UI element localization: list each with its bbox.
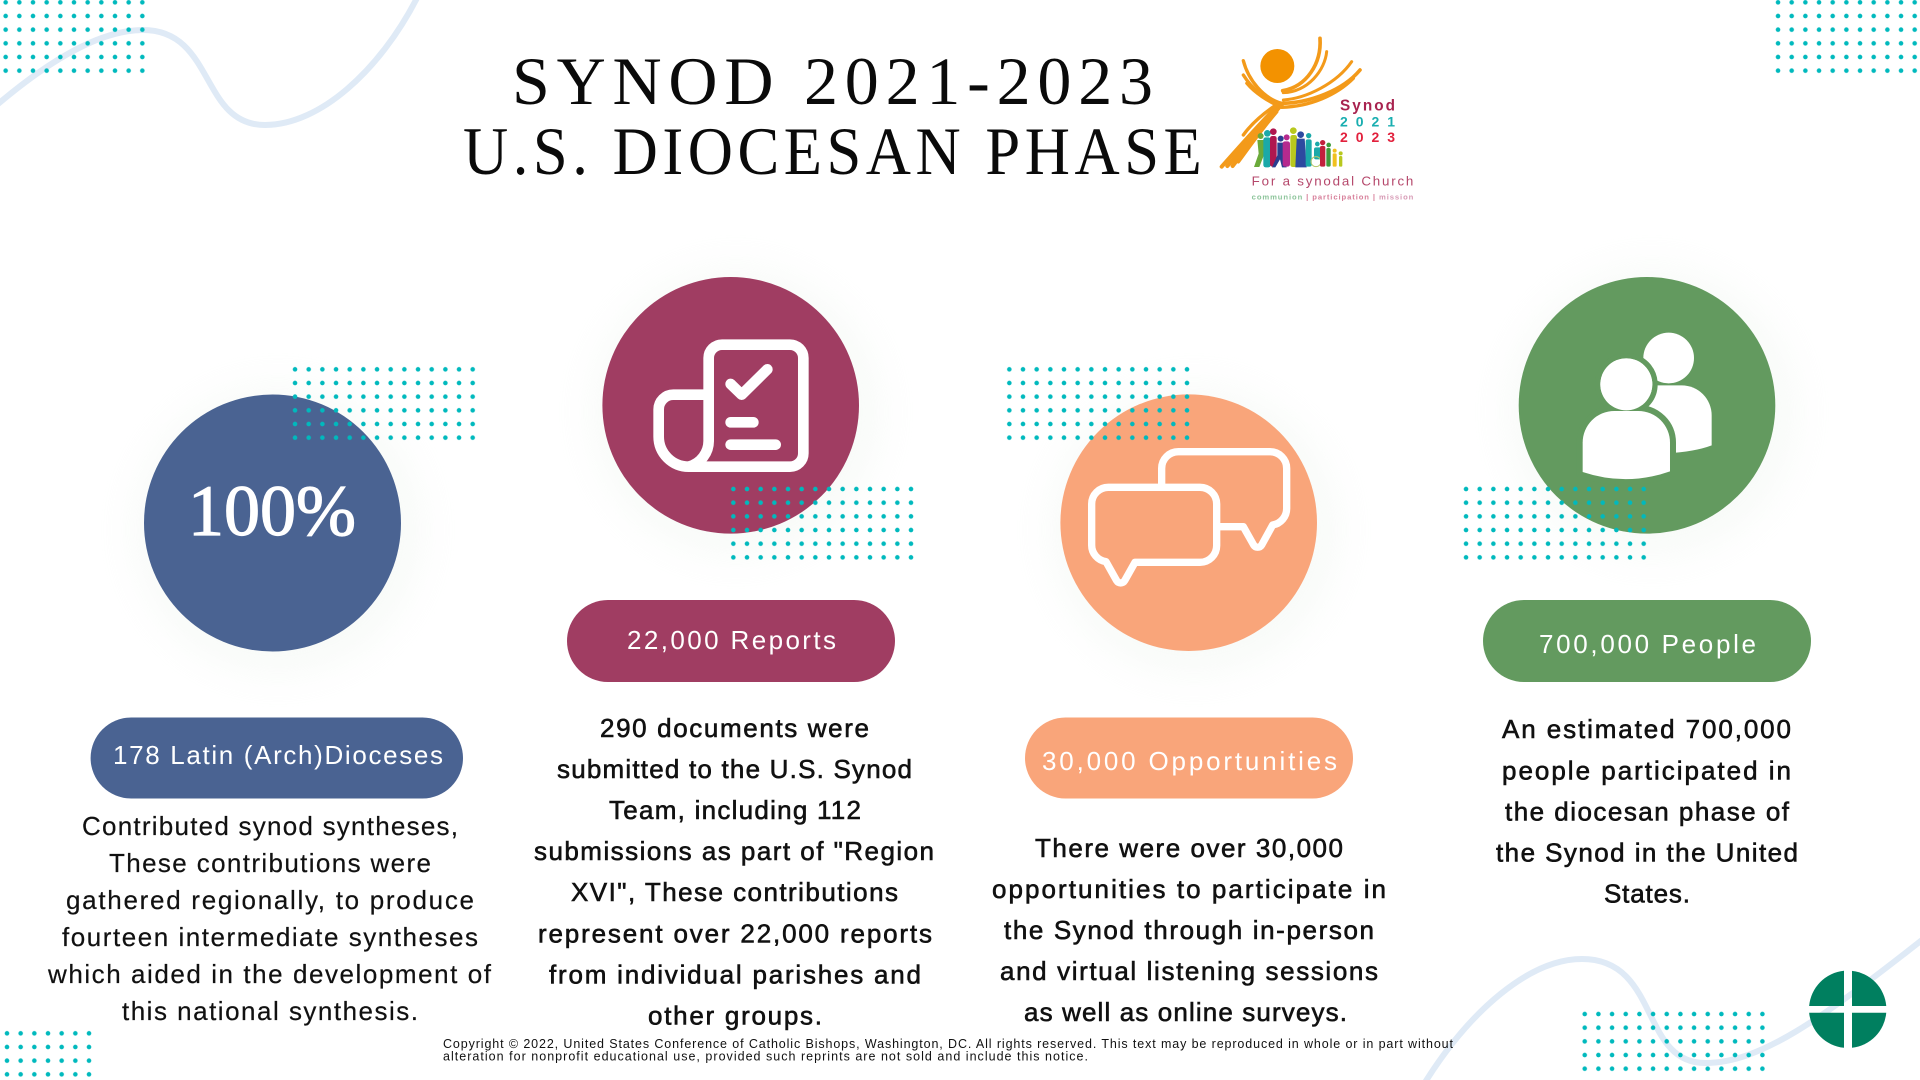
- icon: speech bubbles: [1092, 452, 1287, 583]
- peach circle: [1060, 394, 1317, 651]
- logo: year text: Synod: [1340, 98, 1395, 115]
- logo: year text: 2023: [1340, 129, 1395, 145]
- icon: two people: [1583, 333, 1712, 479]
- body text: gathered regionally, to produce: [66, 885, 474, 915]
- body text: [534, 713, 934, 1030]
- circle glow: [591, 267, 881, 557]
- logo: year text: [1340, 98, 1395, 145]
- green circle: [1519, 277, 1775, 534]
- pill: 22,000 Reports: [627, 625, 836, 655]
- dot grid: [1459, 482, 1650, 564]
- pill: [567, 600, 895, 682]
- pill: [1025, 718, 1353, 798]
- panel: 30,000 opportunities: [992, 362, 1386, 1027]
- maroon circle: [602, 277, 859, 534]
- body text: fourteen intermediate syntheses: [62, 922, 478, 952]
- body text: the Synod in the United: [1496, 838, 1798, 868]
- logo: year text: 2021: [1340, 114, 1395, 130]
- body text: [992, 833, 1386, 1027]
- stat: 100%: 100%: [188, 471, 356, 551]
- body text: Contributed synod syntheses,: [82, 811, 458, 841]
- dot grid: [726, 482, 918, 564]
- body text: this national synthesis.: [122, 996, 418, 1026]
- pill: [91, 718, 463, 798]
- copyright notice: alteration for nonprofit educational use, provided such reprints are not sold and include this notice.: [443, 1050, 1088, 1064]
- icon: document with check: [659, 345, 803, 467]
- body text: Team, including 112: [609, 795, 861, 825]
- dot grid: top right: [1771, 0, 1920, 78]
- pill: [1483, 600, 1811, 682]
- decorative curve: bottom right: [1424, 940, 1920, 1080]
- body text: There were over 30,000: [1035, 833, 1343, 863]
- panel: 700,000 people: [1459, 267, 1811, 908]
- copyright notice: Copyright © 2022, United States Conference of Catholic Bishops, Washington, DC. All rights reserved. This text may be reproduced in whole or in part without: [443, 1037, 1454, 1051]
- circle glow: [1049, 385, 1339, 675]
- panel: 178 Latin dioceses: [47, 362, 492, 1026]
- decorative curve: top left: [0, 0, 417, 125]
- logo: sub-tagline: communion | participation | mission: [1252, 192, 1414, 201]
- dot grid: bottom left: [0, 1026, 96, 1080]
- body text: and virtual listening sessions: [1000, 956, 1378, 986]
- dot grid: top left: [0, 0, 149, 78]
- circle glow: [1507, 267, 1797, 557]
- body text: An estimated 700,000: [1502, 714, 1791, 744]
- body text: XVI", These contributions: [571, 877, 898, 907]
- panel: 22,000 reports: [534, 267, 934, 1030]
- logo: orange figure: [1222, 38, 1360, 167]
- body text: 290 documents were: [600, 713, 869, 743]
- body text: [47, 811, 492, 1026]
- pill: 178 Latin (Arch)Dioceses: [113, 740, 443, 770]
- body text: [1496, 714, 1798, 908]
- pill: 700,000 People: [1539, 629, 1756, 659]
- title: [463, 43, 1202, 190]
- copyright notice: [443, 1037, 1454, 1064]
- circle glow: [133, 385, 423, 675]
- dot grid: [1002, 362, 1194, 444]
- logo: tagline: For a synodal Church: [1252, 174, 1413, 189]
- body text: represent over 22,000 reports: [538, 918, 932, 948]
- USCCB logo: green circle with cross: [1809, 971, 1886, 1048]
- dot grid: [288, 362, 480, 444]
- body text: States.: [1604, 878, 1690, 908]
- body text: which aided in the development of: [47, 959, 492, 989]
- body text: submissions as part of "Region: [534, 836, 934, 866]
- body text: from individual parishes and: [549, 960, 921, 990]
- body text: people participated in: [1502, 756, 1791, 786]
- dot grid: bottom right: [1578, 1007, 1769, 1076]
- title: U.S. DIOCESAN PHASE: [463, 115, 1202, 190]
- body text: These contributions were: [109, 848, 431, 878]
- body text: as well as online surveys.: [1024, 997, 1347, 1027]
- logo: people silhouettes: [1254, 127, 1343, 167]
- body text: the diocesan phase of: [1505, 796, 1790, 826]
- body text: opportunities to participate in: [992, 874, 1386, 904]
- pill: 30,000 Opportunities: [1042, 746, 1337, 776]
- blue circle: [144, 394, 401, 652]
- title: SYNOD 2021-2023: [512, 43, 1153, 119]
- logo: sun: [1260, 49, 1294, 83]
- synod logo: [1222, 38, 1414, 201]
- body text: the Synod through in-person: [1004, 915, 1374, 945]
- body text: other groups.: [648, 1000, 822, 1030]
- body text: submitted to the U.S. Synod: [557, 754, 912, 784]
